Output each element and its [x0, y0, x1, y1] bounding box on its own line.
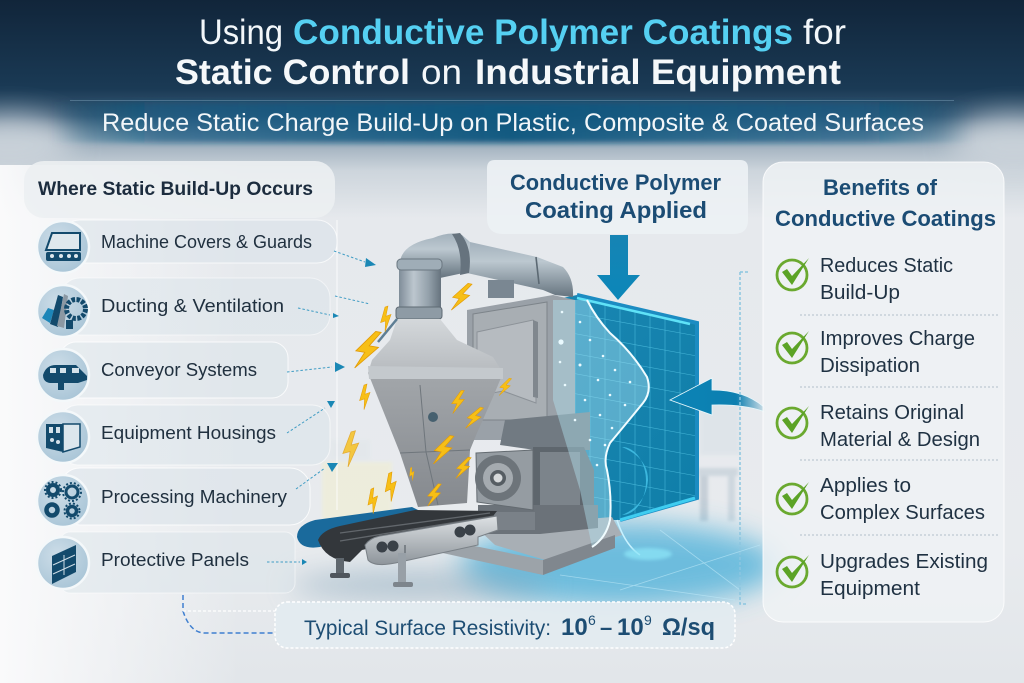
row: processing machinery — [37, 468, 310, 527]
benefit: reduces static: Build-Up — [820, 282, 900, 304]
benefit: complex surfaces — [777, 475, 985, 524]
row: conveyor — [37, 342, 288, 401]
benefit: complex surfaces: Applies to — [820, 475, 911, 497]
benefit: retains design — [777, 402, 980, 451]
duct pipe — [396, 233, 573, 319]
benefit: upgrades equipment — [777, 551, 988, 600]
row: processing machinery: Processing Machinery — [101, 487, 287, 507]
title: Conductive Polymer Coatings — [293, 13, 793, 52]
resistivity box: Typical Surface Resistivity: — [304, 617, 551, 640]
panel heading: Where Static Build-Up Occurs — [38, 179, 313, 200]
benefit: reduces static: Reduces Static — [820, 255, 953, 277]
coating screen panel — [553, 295, 697, 520]
benefit: upgrades equipment: Upgrades Existing — [820, 551, 988, 573]
background factory silhouette — [322, 400, 740, 521]
benefit: improves dissipation: Dissipation — [820, 355, 920, 377]
gear motor — [475, 447, 598, 534]
benefits heading: Benefits of — [823, 175, 937, 200]
benefits heading: Conductive Coatings — [775, 206, 996, 231]
row: protective panels — [37, 532, 295, 593]
icon: ducting — [37, 285, 89, 337]
row: protective panels: Protective Panels — [101, 550, 249, 570]
dashed connector bottom left — [183, 595, 275, 633]
callout: coating applied — [487, 160, 748, 234]
row: machine covers: Machine Covers & Guards — [101, 232, 312, 252]
dotted pointer arrows — [267, 251, 376, 565]
subtitle band: Reduce Static Charge Build-Up on Plastic, Composite & Coated Surfaces — [102, 109, 924, 137]
callout: coating applied: Conductive Polymer — [510, 170, 721, 195]
conveyor — [297, 507, 498, 587]
row: equipment housings — [37, 405, 330, 465]
resistivity box: 9 — [644, 612, 652, 628]
title — [175, 13, 846, 92]
row: ducting — [37, 278, 330, 337]
benefit: retains design: Retains Original — [820, 402, 964, 424]
benefit: complex surfaces: Complex Surfaces — [820, 502, 985, 524]
icon: panels — [37, 537, 89, 589]
subtitle band — [50, 100, 974, 143]
rear housing — [467, 295, 575, 440]
benefit: improves dissipation — [777, 328, 975, 377]
machine illustration — [297, 233, 697, 587]
row: equipment housings: Equipment Housings — [101, 423, 276, 443]
arrow: coating left — [670, 378, 765, 415]
icon: machine cover — [37, 221, 89, 273]
icon: conveyor — [37, 349, 89, 401]
benefit: reduces static — [777, 255, 953, 304]
panel: where static build-up occurs — [24, 161, 337, 593]
row: conveyor: Conveyor Systems — [101, 360, 257, 380]
row: machine covers — [37, 220, 337, 273]
benefit: improves dissipation: Improves Charge — [820, 328, 975, 350]
benefit: upgrades equipment: Equipment — [820, 578, 920, 600]
machine base — [438, 517, 622, 575]
title: Industrial Equipment — [475, 53, 841, 92]
benefits heading — [775, 175, 996, 231]
icon: gears — [37, 475, 89, 527]
resistivity box: 10 — [561, 614, 588, 641]
panel heading — [24, 161, 335, 218]
lightning bolts — [338, 281, 512, 514]
icon: housing — [37, 411, 89, 463]
row: ducting: Ducting & Ventilation — [101, 296, 284, 316]
dashed guide right — [740, 272, 749, 604]
floor — [290, 523, 780, 607]
arrow: coating down — [597, 235, 640, 300]
panel: benefits — [763, 162, 1004, 622]
coating film — [553, 300, 649, 547]
fan cylinder — [622, 447, 648, 515]
hopper — [368, 319, 503, 507]
title: on — [421, 53, 462, 92]
callout: coating applied: Coating Applied — [525, 197, 707, 223]
dark machine body — [500, 412, 590, 450]
title: Using — [199, 13, 283, 52]
title: for — [803, 13, 846, 52]
resistivity box: 10 — [617, 614, 644, 641]
benefit: retains design: Material & Design — [820, 429, 980, 451]
coating spill glow — [617, 520, 672, 560]
resistivity box: 6 — [588, 612, 596, 628]
resistivity box: Ω/sq — [662, 614, 715, 641]
resistivity box — [275, 602, 735, 648]
title: Static Control — [175, 53, 410, 92]
resistivity box: – — [600, 615, 612, 640]
